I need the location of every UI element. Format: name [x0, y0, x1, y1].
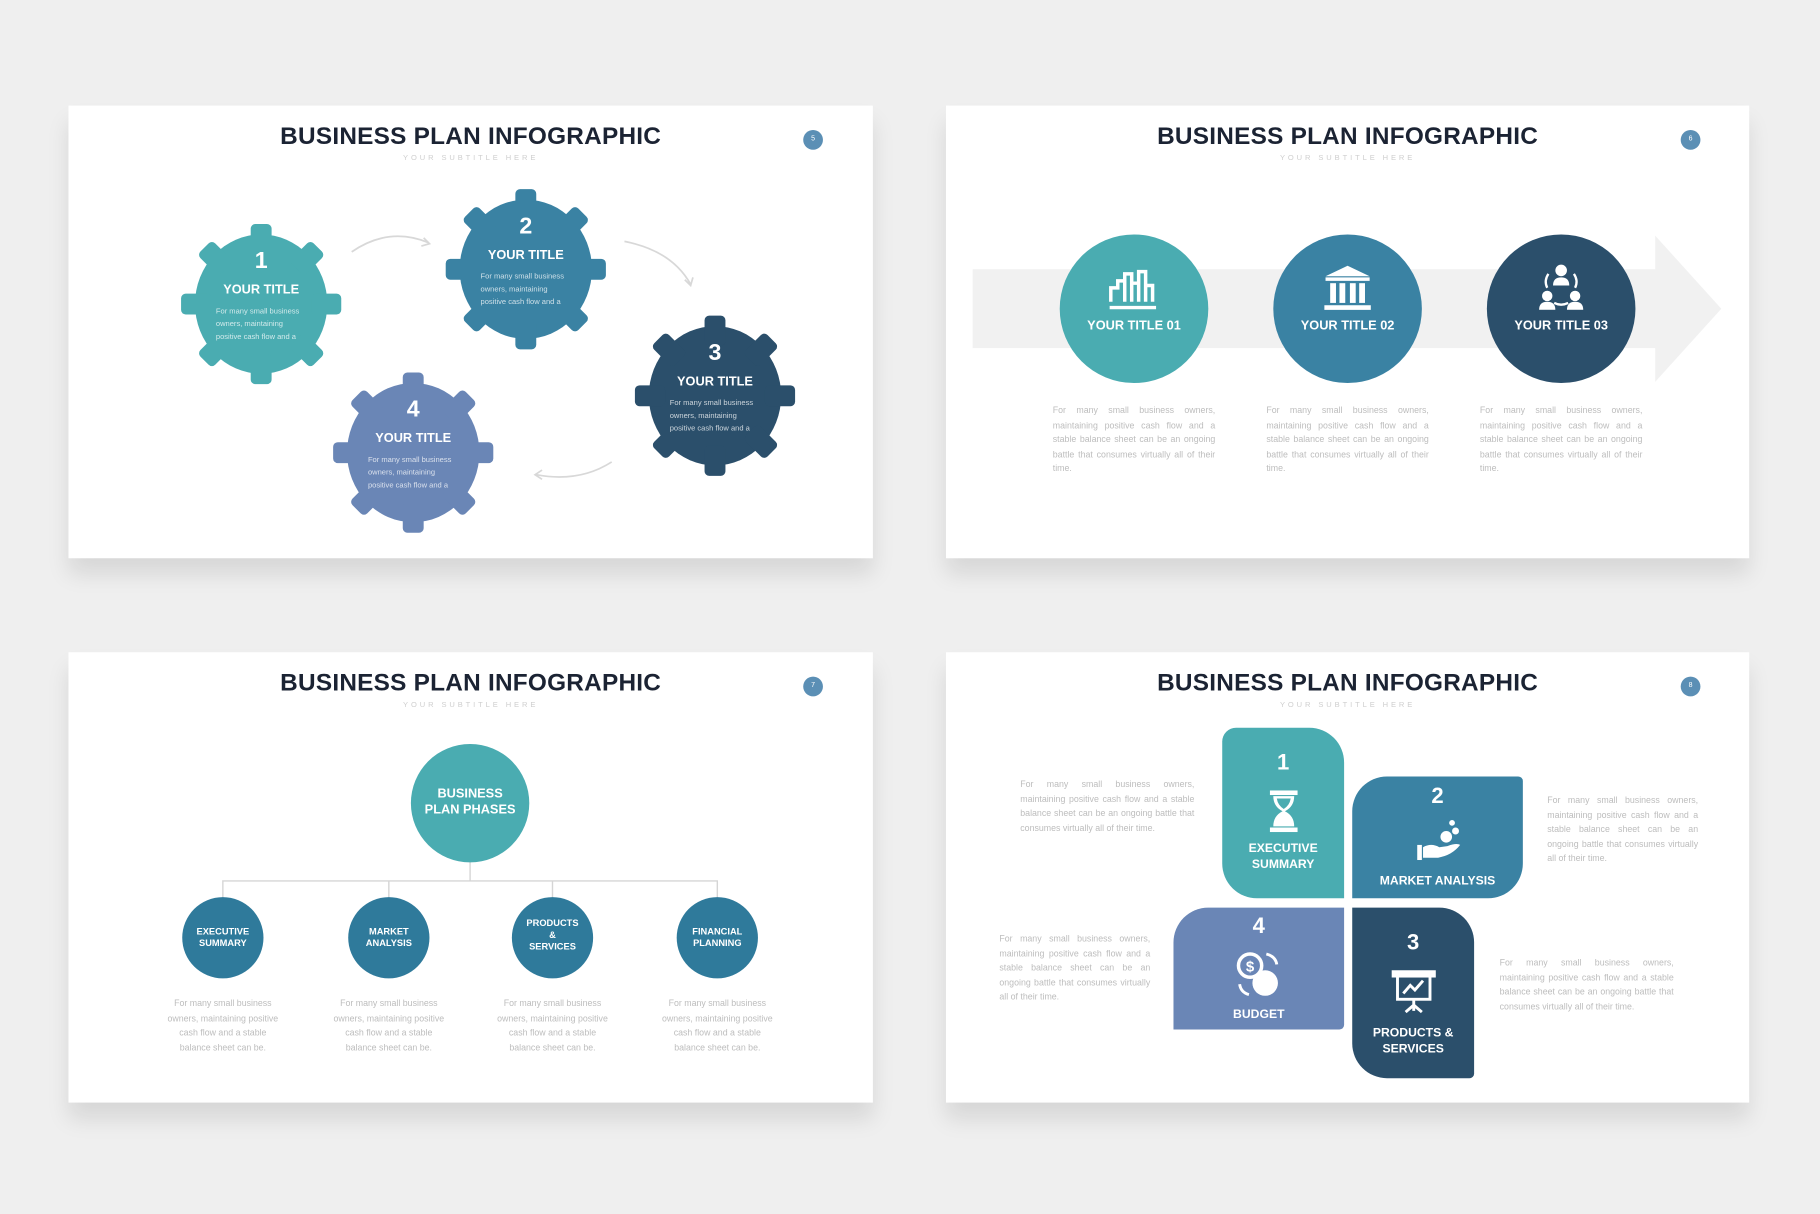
icon: coins [1236, 952, 1278, 996]
background arrow [972, 236, 1721, 382]
gear 1: YOUR TITLE [223, 283, 299, 297]
icon: bar chart [1109, 270, 1156, 310]
node: market analysis [348, 897, 429, 978]
subtitle: YOUR SUBTITLE HERE [403, 701, 538, 709]
main circle: PLAN PHASES [425, 803, 516, 817]
gear 4: YOUR TITLE [375, 432, 451, 446]
tile 1: executive summary: 1 [1277, 751, 1289, 775]
tile 4: budget [1173, 908, 1344, 1029]
main circle [411, 744, 529, 862]
gear 2 [446, 189, 606, 350]
page number: 5 [811, 136, 815, 143]
gear 3: YOUR TITLE [677, 375, 753, 389]
gear 4: 4 [407, 397, 420, 422]
tile 1: executive summary [1222, 728, 1344, 898]
circle 2: YOUR TITLE 02 [1301, 319, 1394, 333]
main circle: BUSINESS [437, 787, 503, 801]
text: node 4: For many small business owners, maintaining positive cash flow and a stable balance sheet can be. [662, 998, 773, 1052]
subtitle: YOUR SUBTITLE HERE [1280, 701, 1415, 709]
node: products & services: PRODUCTS [526, 918, 579, 928]
tile 3: products & services: 3 [1407, 931, 1419, 955]
panel: petal tiles slide [946, 652, 1749, 1103]
icon: team [1539, 264, 1584, 310]
gear 4: For many small business owners, maintaining positive cash flow and a [368, 456, 451, 490]
node: financial planning [677, 897, 758, 978]
tile 2: market analysis: 2 [1431, 785, 1444, 809]
gear 2: For many small business owners, maintaining positive cash flow and a [481, 273, 564, 306]
node: products & services: SERVICES [529, 941, 576, 952]
text block 3: For many small business owners, maintaining positive cash flow and a stable balance sheet can be an ongoing battle that consumes virtually all of their time. [1480, 405, 1642, 474]
node: products & services: & [549, 930, 556, 940]
page number [803, 677, 823, 696]
text: top left: For many small business owners, maintaining positive cash flow and a stable balance sheet can be an ongoing battle that consumes virtually all of their time. [1020, 779, 1194, 833]
icon: presentation board [1392, 970, 1436, 1014]
icon: coins: $ [1246, 958, 1255, 975]
subtitle: YOUR SUBTITLE HERE [403, 154, 538, 162]
panel: gears slide [68, 106, 873, 558]
circle 3: YOUR TITLE 03 [1514, 319, 1608, 333]
arrows [351, 235, 694, 480]
page number [803, 130, 823, 150]
tile 2: market analysis [1352, 776, 1523, 898]
node: products & services [512, 897, 593, 978]
circle 1: YOUR TITLE 01 [1087, 319, 1181, 333]
title: BUSINESS PLAN INFOGRAPHIC [1157, 670, 1538, 696]
gear 2: 2 [519, 214, 532, 239]
tile 1: executive summary: EXECUTIVE [1249, 841, 1318, 855]
node: executive summary: EXECUTIVE [197, 926, 249, 937]
circle 1 [1060, 234, 1208, 383]
node: market analysis: MARKET [369, 926, 409, 937]
node: executive summary [182, 897, 263, 978]
tile 1: executive summary: SUMMARY [1252, 858, 1314, 872]
text: node 1: For many small business owners, maintaining positive cash flow and a stable balance sheet can be. [167, 998, 278, 1052]
text: node 2: For many small business owners, maintaining positive cash flow and a stable balance sheet can be. [333, 998, 444, 1052]
page number [1681, 677, 1700, 696]
gear 3 [634, 316, 796, 476]
node: market analysis: ANALYSIS [366, 938, 412, 948]
page number: 7 [811, 682, 815, 689]
panel: arrow timeline slide [946, 106, 1749, 558]
gear 3: For many small business owners, maintaining positive cash flow and a [670, 399, 753, 433]
connector lines [222, 862, 718, 898]
tile 4: budget: BUDGET [1233, 1007, 1285, 1021]
gear 4 [333, 372, 494, 533]
title: BUSINESS PLAN INFOGRAPHIC [280, 123, 661, 150]
title: BUSINESS PLAN INFOGRAPHIC [1157, 123, 1538, 150]
circle 3 [1487, 234, 1635, 383]
tile 4: budget: 4 [1253, 915, 1265, 939]
text: top right: For many small business owners, maintaining positive cash flow and a stable balance sheet can be an ongoing battle that consumes virtually all of their time. [1547, 795, 1698, 863]
tile 3: products & services: PRODUCTS & [1373, 1026, 1453, 1040]
page number [1681, 130, 1700, 150]
text block 1: For many small business owners, maintaining positive cash flow and a stable balance sheet can be an ongoing battle that consumes virtually all of their time. [1053, 405, 1215, 474]
text: bottom right: For many small business owners, maintaining positive cash flow and a stable balance sheet can be an ongoing battle that consumes virtually all of their time. [1500, 958, 1674, 1011]
tile 3: products & services [1352, 908, 1474, 1078]
gear 1: For many small business owners, maintaining positive cash flow and a [216, 308, 299, 341]
icon: hand with coins [1417, 820, 1460, 860]
node: financial planning: FINANCIAL [692, 926, 742, 937]
text: node 3: For many small business owners, maintaining positive cash flow and a stable balance sheet can be. [497, 998, 608, 1052]
gear 2: YOUR TITLE [488, 248, 564, 262]
circle 2 [1273, 234, 1422, 383]
gear 1 [181, 224, 342, 384]
page number: 8 [1689, 682, 1693, 689]
text: bottom left: For many small business owners, maintaining positive cash flow and a stable balance sheet can be an ongoing battle that consumes virtually all of their time. [999, 933, 1150, 1002]
gear 3: 3 [709, 340, 721, 366]
tile 3: products & services: SERVICES [1382, 1042, 1444, 1056]
icon: hourglass [1270, 790, 1298, 832]
page number: 6 [1689, 136, 1693, 143]
node: financial planning: PLANNING [693, 938, 742, 948]
text block 2: For many small business owners, maintaining positive cash flow and a stable balance sheet can be an ongoing battle that consumes virtually all of their time. [1266, 405, 1429, 474]
title: BUSINESS PLAN INFOGRAPHIC [280, 670, 661, 696]
gear 1: 1 [255, 248, 268, 274]
subtitle: YOUR SUBTITLE HERE [1280, 154, 1415, 162]
panel: hierarchy slide [68, 652, 873, 1103]
icon: bank [1324, 266, 1371, 310]
tile 2: market analysis: MARKET ANALYSIS [1380, 874, 1495, 888]
node: executive summary: SUMMARY [199, 938, 247, 948]
